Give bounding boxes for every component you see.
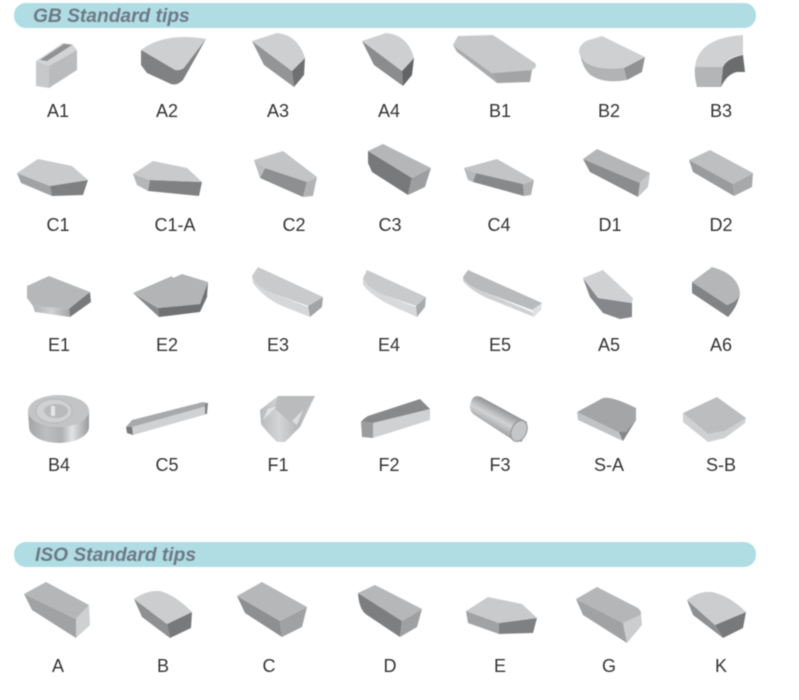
tip A1: A1 <box>47 101 69 121</box>
tip K (ISO): K <box>715 656 727 676</box>
heading bar: ISO Standard tips <box>14 542 756 567</box>
tip A (ISO) <box>24 582 90 676</box>
tip B1 <box>453 35 536 121</box>
tip F3 <box>470 396 530 475</box>
tip C4 <box>464 159 534 235</box>
tip D2 <box>689 150 753 235</box>
tip S-A: S-A <box>594 455 624 475</box>
tip A3 <box>252 33 305 121</box>
tip B2 <box>579 36 645 121</box>
tip A6 <box>692 267 740 355</box>
tip A4: A4 <box>378 101 400 121</box>
tip C3: C3 <box>378 215 402 235</box>
tip B3 <box>695 35 745 121</box>
tip A6: A6 <box>710 335 732 355</box>
tip E4: E4 <box>378 335 400 355</box>
tip C2 <box>254 151 317 235</box>
tip B4: ring <box>28 395 89 475</box>
tip C1: C1 <box>46 215 70 235</box>
tip E2 <box>133 274 208 355</box>
tip B (ISO): B <box>157 656 169 676</box>
tip D1 <box>583 149 650 235</box>
tip A2: A2 <box>156 101 178 121</box>
tip E3: E3 <box>267 335 289 355</box>
tip E (ISO) <box>466 597 537 676</box>
tip A1 <box>36 43 77 121</box>
tip D (ISO): D <box>384 656 396 676</box>
tip B3: B3 <box>710 101 732 121</box>
tip B2: B2 <box>598 101 620 121</box>
tip D2: D2 <box>709 215 733 235</box>
tip E3 <box>252 267 323 355</box>
heading bar: GB Standard tips: GB Standard tips <box>33 6 190 27</box>
tip E5 <box>463 270 542 355</box>
tip A4 <box>362 33 414 121</box>
tip C (ISO) <box>237 582 307 676</box>
tip F3: F3 <box>489 455 511 475</box>
tip C4: C4 <box>487 215 511 235</box>
tip C5: C5 <box>155 455 179 475</box>
tip C3 <box>368 144 431 235</box>
tip E1: E1 <box>48 335 70 355</box>
tip E5: E5 <box>489 335 511 355</box>
tip E (ISO): E <box>494 656 506 676</box>
tip A3: A3 <box>267 101 289 121</box>
tip E1 <box>27 276 91 355</box>
tip A2 <box>141 37 206 121</box>
tip S-A <box>577 398 636 475</box>
tip D1: D1 <box>598 215 622 235</box>
tip F2: F2 <box>378 455 400 475</box>
tip K (ISO) <box>687 592 746 676</box>
tip G (ISO): G <box>602 656 616 676</box>
tip B4: ring: B4 <box>48 455 70 475</box>
tip S-B: S-B <box>706 455 736 475</box>
tip C1-A: C1-A <box>154 215 196 235</box>
tip B1: B1 <box>489 101 511 121</box>
tip C5 <box>126 402 208 475</box>
tip F2 <box>361 399 430 475</box>
tip A5 <box>583 270 633 355</box>
tip C1 <box>17 159 88 235</box>
tip E2: E2 <box>156 335 178 355</box>
tip A (ISO): A <box>52 656 64 676</box>
tip S-B <box>683 397 746 475</box>
tip F1: F1 <box>267 455 289 475</box>
tip B (ISO) <box>134 591 192 676</box>
tip D (ISO) <box>358 585 422 676</box>
tip G (ISO) <box>576 587 642 676</box>
tip A5: A5 <box>598 335 620 355</box>
heading bar: ISO Standard tips: ISO Standard tips <box>35 545 196 566</box>
tip C (ISO): C <box>262 656 276 676</box>
heading bar: GB Standard tips <box>14 3 756 28</box>
tip C2: C2 <box>282 215 306 235</box>
tip F1 <box>260 396 315 475</box>
tip E4 <box>363 270 426 355</box>
tip C1-A <box>133 161 202 235</box>
